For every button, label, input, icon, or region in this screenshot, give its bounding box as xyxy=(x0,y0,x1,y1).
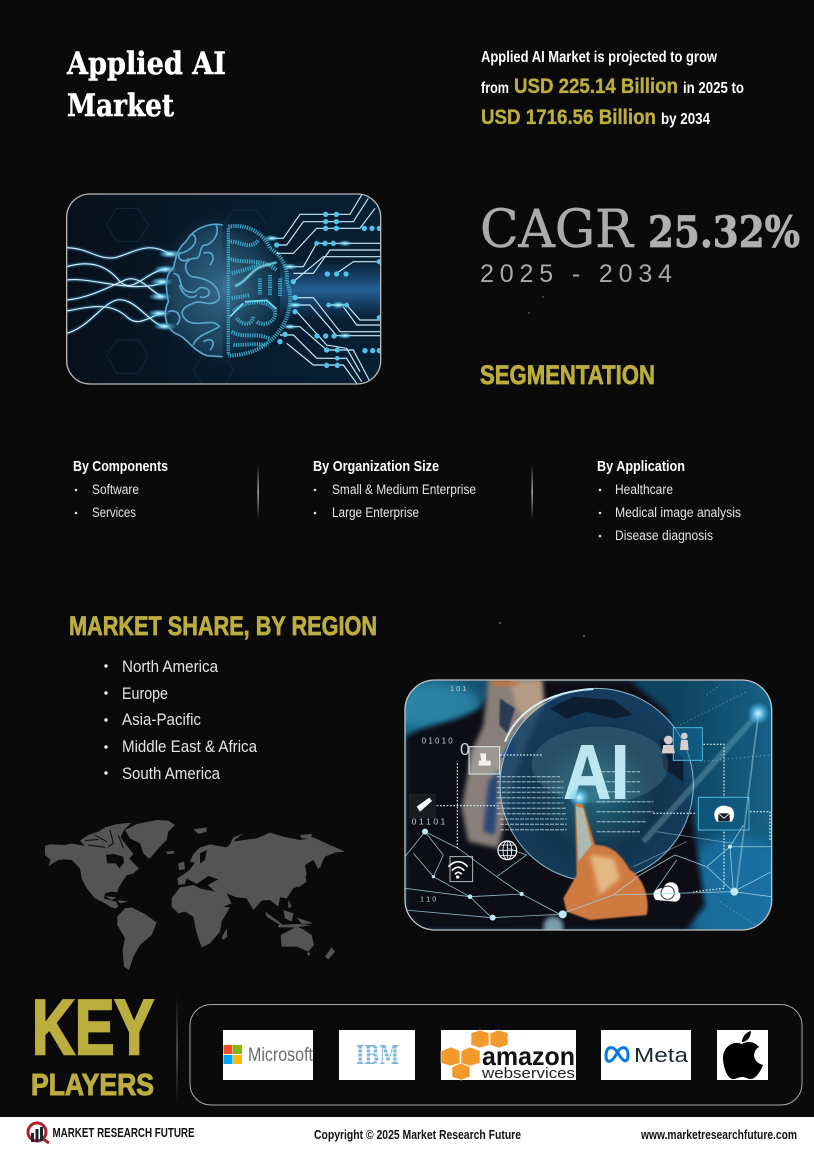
title: Market xyxy=(67,88,175,124)
region list: South America xyxy=(122,764,220,783)
logo: Microsoft: Microsoft xyxy=(248,1045,314,1066)
segment: by application: Healthcare xyxy=(615,482,673,497)
logo: Amazon Web Services: amazon xyxy=(482,1041,575,1071)
CAGR: 2025 - 2034 xyxy=(480,260,672,288)
segment: by components xyxy=(73,458,168,520)
copyright: Copyright © 2025 Market Research Future xyxy=(314,1128,521,1142)
panel: key player logos xyxy=(190,1004,802,1105)
CAGR: CAGR xyxy=(480,200,635,260)
specks xyxy=(499,296,585,637)
region list: North America xyxy=(122,657,218,676)
CAGR xyxy=(480,200,800,288)
market projection text: USD 1716.56 Billion xyxy=(481,106,656,129)
logo: Market Research Future: MARKET RESEARCH FUTURE xyxy=(52,1126,194,1140)
binary digits: 0 1 1 0 1 xyxy=(412,816,446,826)
world map xyxy=(45,820,345,970)
heading: key players: KEY xyxy=(32,983,154,1071)
market projection text: by 2034 xyxy=(661,111,710,128)
region list: Europe xyxy=(122,684,168,703)
logo: Amazon Web Services: webservices xyxy=(481,1065,575,1082)
segment: by organization size xyxy=(313,458,476,520)
icons xyxy=(417,733,734,902)
segment: by application: By Application xyxy=(597,458,685,475)
segment: by application xyxy=(597,458,741,543)
binary digits: 0 1 0 1 0 xyxy=(422,736,453,745)
market projection text: from xyxy=(481,80,509,97)
data text block xyxy=(497,772,653,832)
binary digits: 0 xyxy=(460,739,470,759)
network lines xyxy=(405,825,772,918)
market projection text: Applied AI Market is projected to grow xyxy=(481,49,717,66)
segment: by components: By Components xyxy=(73,458,168,475)
logo: Meta: Meta xyxy=(634,1045,689,1067)
segment: by organization size: By Organization Size xyxy=(313,458,439,475)
heading: market share by region: MARKET SHARE, BY REGION xyxy=(69,611,377,641)
heading: key players xyxy=(31,983,154,1102)
logo: Apple xyxy=(717,1030,768,1080)
logo: Amazon Web Services xyxy=(441,1030,576,1082)
logo: Meta xyxy=(601,1030,691,1080)
region list: Asia-Pacific xyxy=(122,710,201,729)
brain left hemisphere xyxy=(165,224,223,357)
segment: by application: Medical image analysis xyxy=(615,505,741,520)
logo: Market Research Future xyxy=(28,1123,194,1143)
title xyxy=(66,46,226,124)
title: Applied AI xyxy=(66,46,226,82)
segment: by components: Software xyxy=(92,482,139,497)
binary digits: 1 1 0 xyxy=(420,895,436,904)
segment: by organization size: Small & Medium Enterprise xyxy=(332,482,476,497)
market projection text xyxy=(481,49,744,129)
binary digits: 1 0 1 xyxy=(450,684,466,693)
info boxes xyxy=(409,728,749,882)
segment: by application: Disease diagnosis xyxy=(615,528,713,543)
logo: IBM: IBM xyxy=(356,1041,399,1071)
globe xyxy=(500,688,693,882)
segment: by organization size: Large Enterprise xyxy=(332,505,419,520)
binary digits xyxy=(412,684,470,904)
finger and hand xyxy=(563,803,648,920)
image: AI touch globe xyxy=(404,679,772,931)
market projection text: in 2025 to xyxy=(683,80,744,97)
heading: segmentation: SEGMENTATION xyxy=(480,360,655,390)
region list xyxy=(104,657,257,783)
segment: by components: Services xyxy=(92,505,136,520)
heading: key players: PLAYERS xyxy=(31,1067,154,1102)
footer bar xyxy=(0,1117,814,1150)
logo: IBM xyxy=(339,1030,415,1080)
AI letters: AI xyxy=(563,730,629,815)
brain right hemisphere binary digits xyxy=(228,226,290,356)
market projection text: USD 225.14 Billion xyxy=(514,75,678,98)
image: AI brain circuit xyxy=(67,194,382,387)
region list: Middle East & Africa xyxy=(122,737,257,756)
circuit lines xyxy=(270,195,381,383)
logo: Microsoft xyxy=(223,1030,314,1080)
dotted connectors xyxy=(437,744,770,892)
